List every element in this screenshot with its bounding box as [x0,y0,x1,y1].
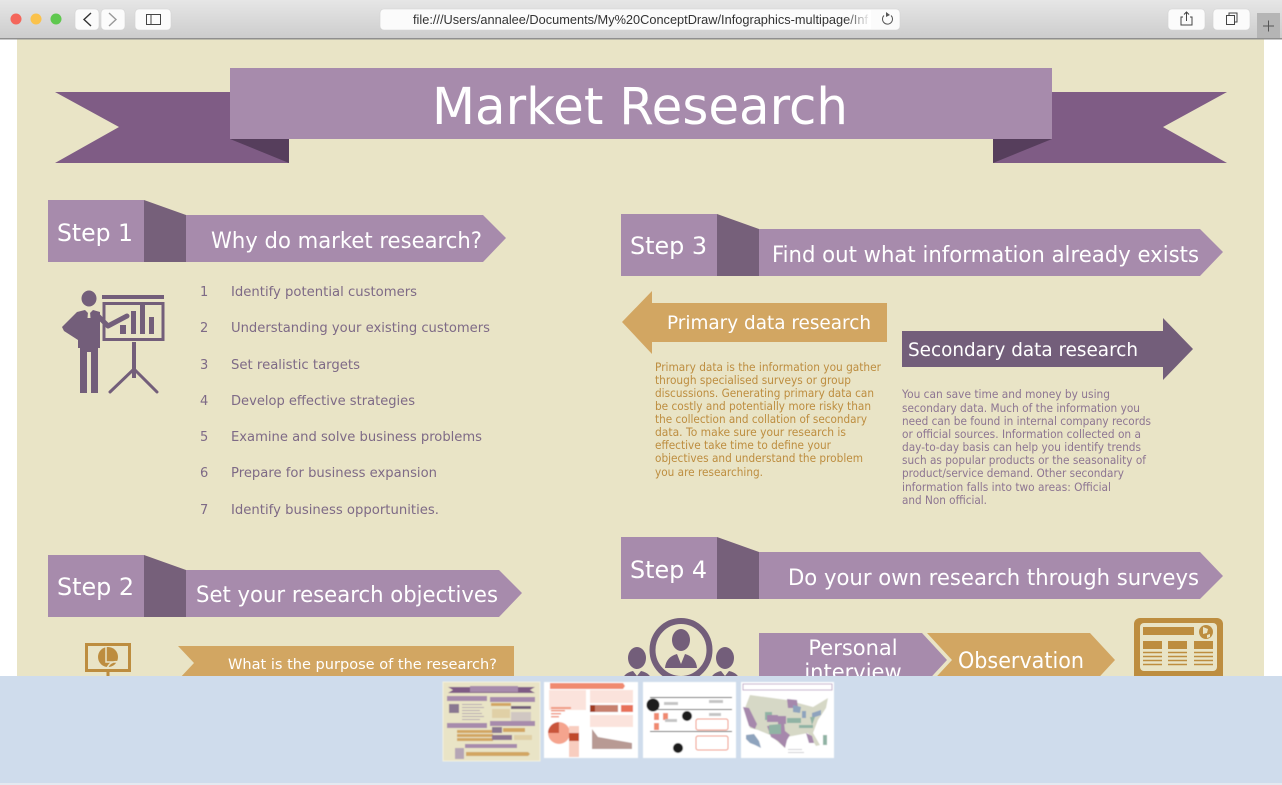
browser toolbar [0,0,1282,40]
list: reasons for market research: Prepare for business expansion [231,466,437,481]
list: reasons for market research: Identify business opportunities. [231,503,439,518]
text block: secondary data: such as popular products or the seasonality of [902,453,1147,467]
list: reasons for market research: 2 [200,321,208,336]
address bar [380,9,900,30]
step 4 header: Do your own research through surveys [788,566,1199,591]
icon: presentation screen with pie chart [86,644,130,680]
arrow: observation [927,633,1115,687]
text block: secondary data: secondary data. Much of the information you [902,401,1140,415]
list: reasons for market research: Understanding your existing customers [231,321,490,336]
address bar: file:///Users/annalee/Documents/My%20ConceptDraw/Infographics-multipage/Inf [413,13,869,27]
step 3 header [621,214,1223,276]
sidebar button [135,9,171,30]
thumbnail: market research [443,682,540,761]
arrow: observation: Observation [958,649,1084,674]
thumbnail strip [0,676,1282,785]
text block: primary data: be costly and potentially more risky than [655,399,871,413]
title text: Market Research [432,78,848,137]
step 4 header [621,537,1223,599]
step 4 header: Step 4 [630,556,707,584]
infographic background [17,39,1264,679]
arrow: secondary data research [902,318,1193,380]
list: reasons for market research: 4 [200,394,208,409]
text block: primary data: discussions. Generating primary data can [655,386,874,400]
traffic lights [10,14,62,24]
text block: primary data: data. To make sure your research is [655,425,846,439]
text block: secondary data: and Non official. [902,493,987,507]
text block: secondary data: product/service demand. Other secondary [902,466,1124,480]
callout: purpose of the research: What is the purpose of the research? [228,657,497,673]
text block: secondary data: need can be found in internal company records [902,414,1151,428]
list: reasons for market research [200,285,490,518]
text block: primary data: Primary data is the information you gather [655,360,881,374]
list: reasons for market research: 6 [200,466,208,481]
share button [1168,9,1205,30]
text block: primary data: through specialised surveys or group [655,373,851,387]
list: reasons for market research: 5 [200,430,208,445]
list: reasons for market research: 7 [200,503,208,518]
list: reasons for market research: 1 [200,285,208,300]
arrow: secondary data research: Secondary data research [908,339,1138,361]
arrow: personal interview [759,633,947,687]
list: reasons for market research: Develop effective strategies [231,394,415,409]
text block: secondary data: information falls into two areas: Official [902,480,1111,494]
list: reasons for market research: 3 [200,358,208,373]
icon: group of people [622,621,740,682]
arrow: personal interview: Personal [808,636,898,660]
arrow: primary data research [622,291,887,354]
title banner [55,68,1227,163]
icon: presenter with chart board [62,290,164,393]
list: reasons for market research: Examine and solve business problems [231,430,482,445]
new tab button [1257,13,1280,38]
icon: newspaper with globe [1134,618,1223,684]
tabs button [1213,9,1250,30]
text block: primary data: objectives and understand the problem [655,451,863,465]
step 2 header [48,555,522,617]
step 1 header: Why do market research? [211,229,482,254]
text block: primary data [655,360,881,479]
step 2 header: Step 2 [57,573,134,601]
thumbnail: international trade [544,682,638,758]
text block: secondary data: or official sources. Information collected on a [902,427,1141,441]
text block: primary data: you are researching. [655,465,763,479]
step 3 header: Step 3 [630,232,707,260]
callout: purpose of the research [178,646,514,680]
thumbnail: usa map [741,682,834,758]
step 3 header: Find out what information already exists [772,243,1199,268]
back and forward buttons [75,9,125,30]
thumbnail: supply chain [643,682,736,758]
text block: primary data: effective take time to define your [655,438,831,452]
step 2 header: Set your research objectives [196,583,498,608]
list: reasons for market research: Identify potential customers [231,285,417,300]
list: reasons for market research: Set realistic targets [231,358,360,373]
text block: secondary data [901,387,1151,507]
step 1 header: Step 1 [57,219,133,247]
step 1 header [48,200,506,262]
text block: secondary data: You can save time and money by using [901,387,1110,401]
text block: primary data: the collection and collation of secondary [655,412,867,426]
arrow: personal interview: interview [804,660,902,684]
arrow: primary data research: Primary data research [667,312,871,334]
text block: secondary data: day-to-day basis can help you identify trends [902,440,1141,454]
